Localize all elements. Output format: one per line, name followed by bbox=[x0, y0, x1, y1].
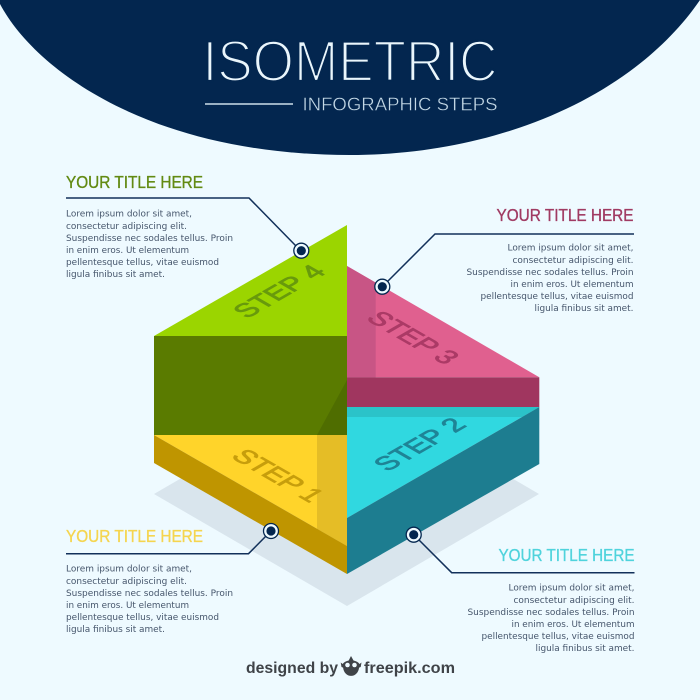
callout body text bbox=[466, 244, 634, 314]
callout body text bbox=[66, 210, 233, 280]
callout heading: YOUR TITLE HERE bbox=[498, 545, 634, 565]
step 1 label: STEP 1 bbox=[225, 445, 331, 506]
callout body text: in enim eros. Ut elementum bbox=[512, 620, 634, 630]
callout body text: ligula finibus sit amet. bbox=[536, 644, 634, 654]
callout body text: Lorem ipsum dolor sit amet, bbox=[508, 244, 634, 254]
callout body text: in enim eros. Ut elementum bbox=[66, 246, 189, 256]
header banner bbox=[0, 0, 700, 155]
callout: step 4 bbox=[66, 172, 309, 280]
callout body text: Suspendisse nec sodales tellus. Proin bbox=[466, 268, 634, 278]
callout body text: ligula finibus sit amet. bbox=[66, 270, 165, 280]
callout body text: Lorem ipsum dolor sit amet, bbox=[66, 210, 192, 220]
callout body text: Lorem ipsum dolor sit amet, bbox=[508, 584, 634, 594]
callout: step 2 bbox=[406, 527, 634, 654]
callout body text: pellentesque tellus, vitae euismod bbox=[66, 258, 219, 268]
icon: freepik mascot bbox=[341, 656, 362, 676]
callout connector bbox=[66, 198, 296, 246]
callout body text: consectetur adipiscing elit. bbox=[66, 222, 187, 232]
callout body text: pellentesque tellus, vitae euismod bbox=[480, 292, 634, 302]
callout marker bbox=[375, 279, 390, 294]
step 3 block bbox=[347, 266, 539, 407]
title: ISOMETRIC bbox=[202, 30, 498, 94]
callout body text: consectetur adipiscing elit. bbox=[66, 577, 187, 587]
callout body text bbox=[66, 565, 233, 635]
step 2 block bbox=[347, 407, 539, 574]
callout connector bbox=[387, 234, 634, 282]
callout body text bbox=[468, 584, 634, 654]
footer credit: freepik.com bbox=[364, 660, 455, 677]
callout: step 1 bbox=[66, 524, 278, 635]
callout connector bbox=[418, 539, 634, 573]
callout connector bbox=[66, 535, 267, 554]
step 3 label: STEP 3 bbox=[360, 307, 466, 368]
footer credit: designed by bbox=[246, 660, 338, 677]
subtitle: INFOGRAPHIC STEPS bbox=[302, 93, 498, 114]
callout body text: pellentesque tellus, vitae euismod bbox=[482, 632, 634, 642]
callout heading: YOUR TITLE HERE bbox=[66, 172, 203, 192]
callout heading: YOUR TITLE HERE bbox=[66, 526, 203, 546]
callout body text: consectetur adipiscing elit. bbox=[514, 596, 634, 606]
callout body text: Suspendisse nec sodales tellus. Proin bbox=[66, 589, 233, 599]
callout marker bbox=[294, 243, 309, 258]
step 1 block bbox=[154, 435, 347, 574]
callout body text: Lorem ipsum dolor sit amet, bbox=[66, 565, 192, 575]
footer credit bbox=[246, 656, 455, 677]
callout body text: consectetur adipiscing elit. bbox=[512, 256, 634, 266]
callout marker bbox=[406, 527, 421, 542]
callout body text: in enim eros. Ut elementum bbox=[510, 280, 634, 290]
callout: step 3 bbox=[375, 205, 634, 314]
callout heading: YOUR TITLE HERE bbox=[496, 205, 634, 225]
callout body text: pellentesque tellus, vitae euismod bbox=[66, 613, 219, 623]
floor shadow bbox=[154, 382, 539, 606]
callout body text: ligula finibus sit amet. bbox=[534, 304, 634, 314]
step 4 block bbox=[154, 225, 347, 435]
callout body text: Suspendisse nec sodales tellus. Proin bbox=[66, 234, 233, 244]
callout body text: ligula finibus sit amet. bbox=[66, 625, 165, 635]
callout body text: in enim eros. Ut elementum bbox=[66, 601, 189, 611]
step 4 label: STEP 4 bbox=[226, 261, 332, 322]
isometric diagram bbox=[154, 225, 539, 574]
callout body text: Suspendisse nec sodales tellus. Proin bbox=[468, 608, 634, 618]
callout marker bbox=[264, 524, 278, 538]
step 2 label: STEP 2 bbox=[367, 414, 473, 475]
